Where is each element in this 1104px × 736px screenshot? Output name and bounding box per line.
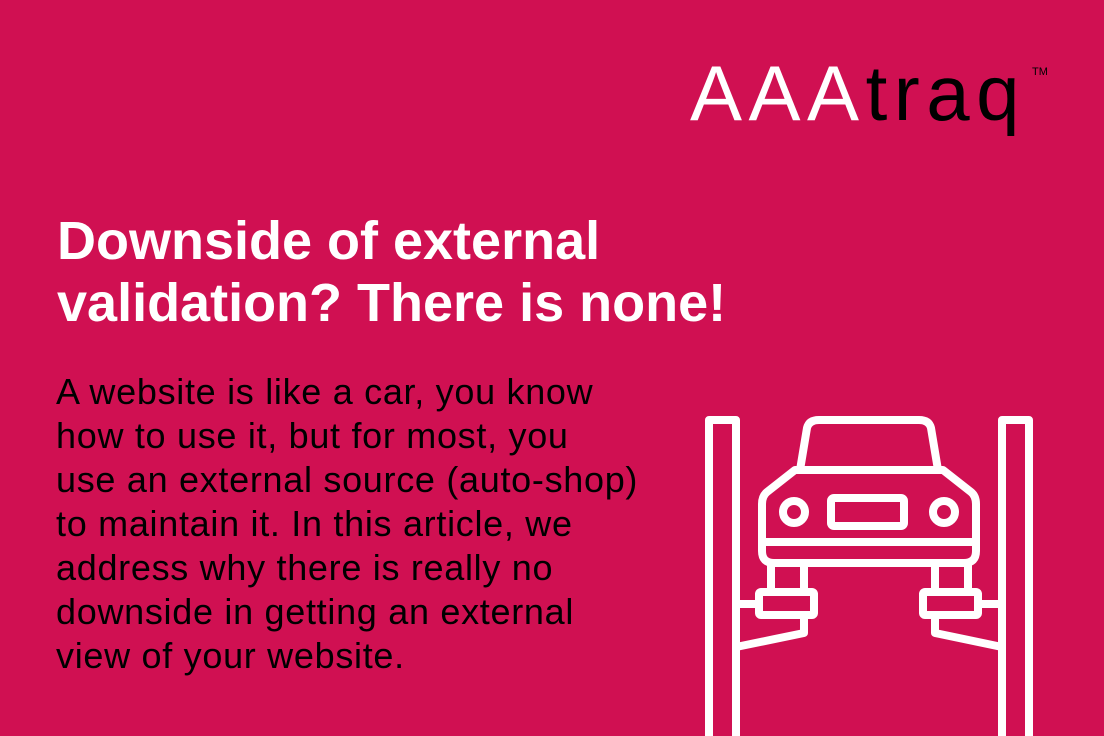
body text: how to use it, but for most, you bbox=[56, 415, 569, 456]
body text: downside in getting an external bbox=[56, 591, 574, 632]
body text: address why there is really no bbox=[56, 547, 553, 588]
body text: A website is like a car, you know bbox=[56, 371, 593, 412]
title: Downside of external bbox=[57, 211, 600, 271]
body text: use an external source (auto-shop) bbox=[56, 459, 638, 500]
trademark: TM bbox=[1032, 66, 1048, 78]
title: validation? There is none! bbox=[57, 273, 726, 333]
body text bbox=[56, 371, 638, 676]
body text: view of your website. bbox=[56, 635, 405, 676]
logo: AAAtraq bbox=[690, 49, 1026, 137]
body text: to maintain it. In this article, we bbox=[56, 503, 573, 544]
title bbox=[57, 211, 726, 333]
